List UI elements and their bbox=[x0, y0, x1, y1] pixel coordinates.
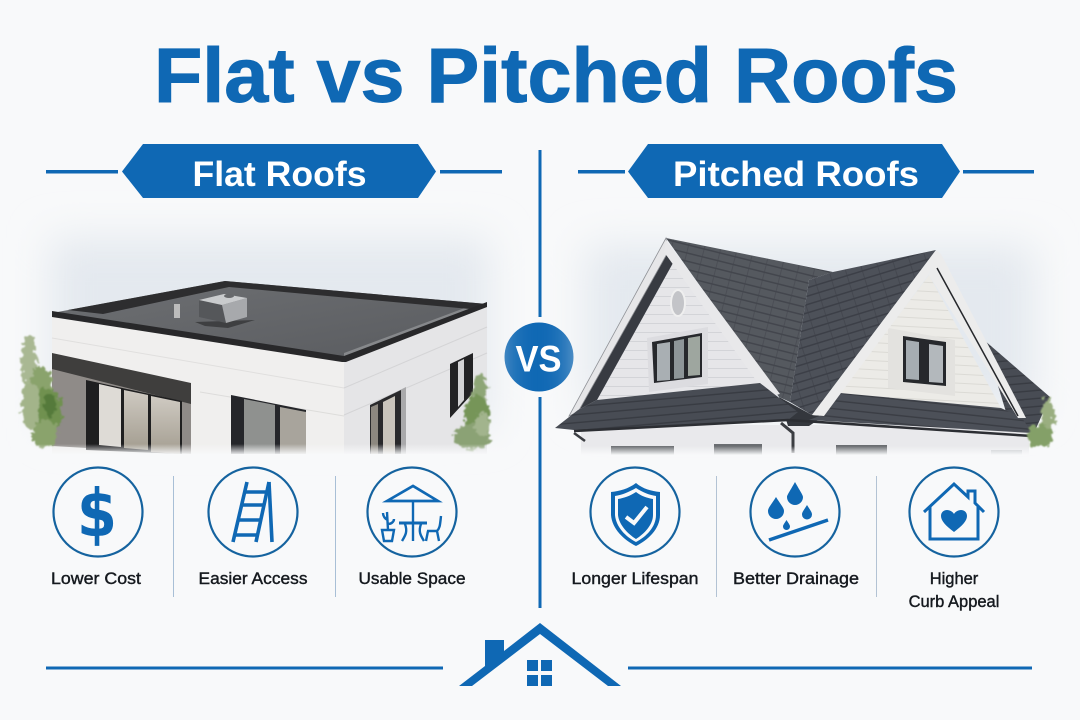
side window bbox=[370, 387, 406, 454]
parapet back bbox=[68, 281, 487, 314]
ground-floor windows bbox=[611, 444, 1022, 455]
roof membrane bbox=[52, 281, 487, 360]
HVAC unit bbox=[195, 294, 255, 328]
label: easier access: Easier Access bbox=[198, 570, 308, 588]
far right roof bbox=[984, 340, 1050, 433]
left window bbox=[647, 327, 708, 392]
upper side window bbox=[450, 353, 473, 418]
left vent bbox=[671, 290, 685, 316]
label: lower cost: Lower Cost bbox=[51, 570, 141, 588]
icon: patio bbox=[382, 486, 441, 541]
gutter bbox=[574, 420, 1032, 453]
icon: drops and slope bbox=[768, 482, 828, 540]
bottom fade bbox=[10, 444, 505, 455]
feature: better drainage bbox=[750, 468, 840, 556]
left gable shadow bbox=[578, 250, 673, 410]
panel heading: pitched roofs bbox=[578, 144, 1034, 198]
feature: easier access bbox=[208, 468, 298, 556]
parapet ledge bbox=[344, 304, 487, 360]
roof vent bbox=[174, 304, 180, 318]
lower left roof bbox=[555, 383, 798, 430]
feature: longer lifespan bbox=[590, 468, 680, 556]
illustration: flat roof building bbox=[10, 238, 505, 463]
feature: usable space bbox=[368, 468, 456, 556]
left tree bbox=[21, 336, 62, 448]
illustration: pitched roof house bbox=[545, 238, 1065, 455]
label: higher curb appeal: Higher bbox=[930, 570, 979, 588]
sky bbox=[50, 238, 490, 428]
divider bbox=[173, 476, 174, 597]
title: Flat vs Pitched Roofs bbox=[154, 33, 958, 119]
left wall bbox=[52, 313, 344, 454]
panel heading: pitched roofs: Pitched Roofs bbox=[673, 155, 919, 194]
right tree bbox=[454, 375, 490, 450]
wood cladding bbox=[52, 368, 191, 454]
corner tree bbox=[1027, 398, 1055, 448]
parapet front bbox=[52, 302, 487, 362]
left gable trim bbox=[569, 238, 668, 416]
label: longer lifespan: Longer Lifespan bbox=[572, 570, 698, 588]
walls bbox=[581, 425, 1029, 455]
right wall bbox=[344, 305, 487, 454]
divider bbox=[876, 476, 877, 597]
valley fill bbox=[779, 397, 824, 426]
label: higher curb appeal: Curb Appeal bbox=[909, 593, 999, 611]
icon: ladder bbox=[233, 482, 272, 542]
footer rules bbox=[46, 666, 1032, 670]
label: better drainage: Better Drainage bbox=[733, 570, 859, 588]
icon: shield bbox=[611, 483, 660, 546]
VS badge: VS bbox=[516, 338, 562, 380]
divider bbox=[716, 476, 717, 597]
left gable facade bbox=[597, 263, 760, 400]
sky bbox=[585, 245, 1035, 410]
sliding window bbox=[86, 380, 182, 454]
VS badge bbox=[504, 322, 574, 392]
front window bbox=[231, 395, 306, 454]
icon: dollar: $ bbox=[77, 475, 117, 552]
main roof left plane bbox=[666, 238, 833, 402]
feature: lower cost bbox=[54, 468, 142, 556]
right gable trim bbox=[812, 250, 936, 416]
label: usable space: Usable Space bbox=[358, 570, 466, 588]
icon: footer house bbox=[459, 623, 621, 686]
icon: house with heart bbox=[924, 484, 984, 539]
awning band bbox=[52, 353, 191, 404]
lower right roof bbox=[809, 393, 1032, 433]
panel heading: flat roofs: Flat Roofs bbox=[192, 155, 366, 194]
bottom fade bbox=[545, 446, 1065, 455]
right gable facade bbox=[840, 275, 1001, 408]
right window bbox=[888, 328, 955, 396]
center divider bbox=[538, 150, 542, 608]
divider bbox=[335, 476, 336, 597]
feature: higher curb appeal bbox=[910, 468, 998, 556]
panel heading: flat roofs bbox=[46, 144, 502, 198]
main roof right plane bbox=[790, 250, 936, 415]
